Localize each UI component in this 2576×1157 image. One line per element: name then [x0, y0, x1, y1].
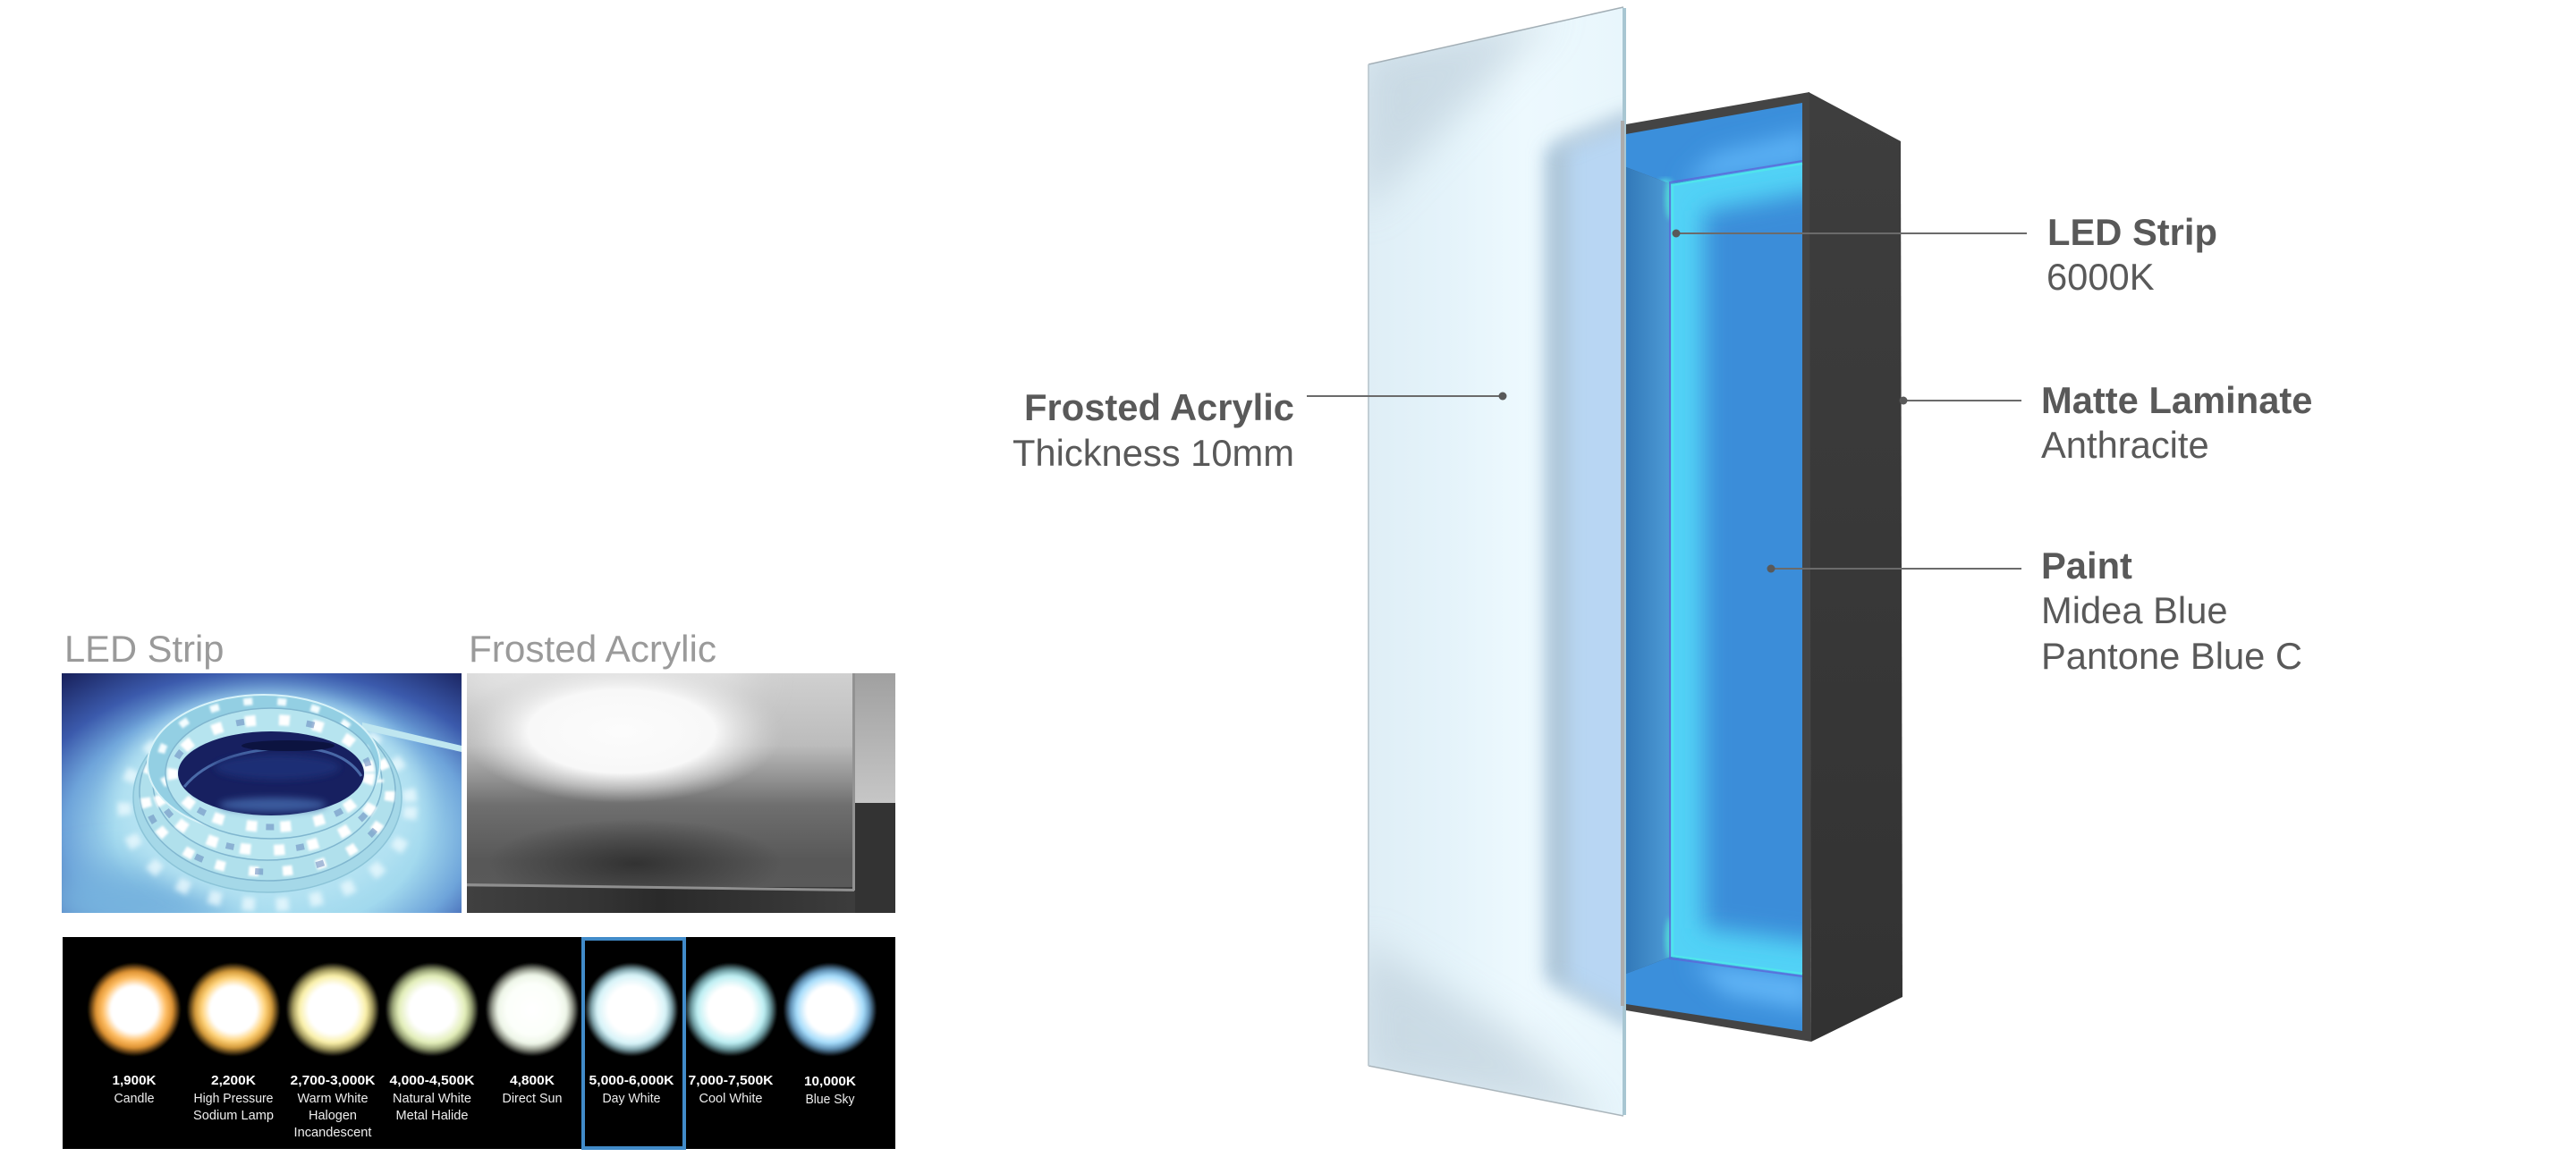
- image: frosted acrylic photo: [467, 673, 895, 913]
- callout: Matte Laminate leader line: [1900, 397, 2021, 404]
- heading: LED Strip photo title: LED Strip: [64, 628, 224, 670]
- icon: 2,700-3,000K glow: Halogen: [309, 1108, 357, 1123]
- icon: 2,700-3,000K glow: [286, 963, 379, 1140]
- icon: 1,900K glow: Candle: [114, 1091, 154, 1106]
- icon: 5,000-6,000K glow: 5,000-6,000K: [589, 1073, 674, 1088]
- text block: Frosted Acrylic label: Frosted Acrylic: [1024, 386, 1294, 428]
- icon: 7,000-7,500K glow: [684, 963, 777, 1106]
- LED strip line: [1670, 161, 1802, 976]
- box front frame: [1626, 92, 1811, 1042]
- image: LED strip coil photo: [62, 673, 462, 913]
- callout: Frosted Acrylic leader line: [1307, 392, 1506, 401]
- text block: LED Strip label: LED Strip: [2047, 211, 2217, 253]
- illustration: frosted acrylic panel: [1360, 7, 1637, 1127]
- floor of box: [1626, 957, 1802, 1031]
- left wall of box: [1626, 167, 1671, 974]
- icon: 2,700-3,000K glow: Warm White: [297, 1091, 369, 1106]
- callout: selected temperature highlight: [583, 939, 684, 1148]
- icon: 4,000-4,500K glow: [386, 963, 479, 1123]
- icon: 10,000K glow: 10,000K: [804, 1074, 856, 1089]
- icon: 7,000-7,500K glow: 7,000-7,500K: [689, 1073, 774, 1088]
- icon: 5,000-6,000K glow: [585, 963, 678, 1106]
- text block: Matte Laminate label: Matte Laminate: [2041, 379, 2312, 421]
- box side laminate: [1809, 92, 1902, 1042]
- icon: 4,800K glow: [486, 963, 579, 1106]
- callout: Paint leader line: [1767, 565, 2021, 572]
- icon: 4,800K glow: 4,800K: [510, 1073, 555, 1088]
- text block: Paint label: [2041, 545, 2302, 677]
- text block: LED Strip label: 6000K: [2046, 256, 2155, 298]
- icon: 1,900K glow: 1,900K: [113, 1073, 157, 1088]
- text block: LED Strip label: [2046, 211, 2217, 298]
- icon: 2,200K glow: 2,200K: [211, 1073, 256, 1088]
- text block: Matte Laminate label: Anthracite: [2041, 424, 2209, 466]
- text block: Frosted Acrylic label: Thickness 10mm: [1013, 432, 1294, 474]
- icon: 4,800K glow: Direct Sun: [503, 1091, 562, 1106]
- ceiling of box: [1626, 103, 1802, 184]
- text block: Paint label: Midea Blue: [2041, 589, 2228, 631]
- text block: Frosted Acrylic label: [1013, 386, 1294, 474]
- icon: 2,700-3,000K glow: 2,700-3,000K: [290, 1073, 376, 1088]
- icon: 4,000-4,500K glow: Metal Halide: [395, 1108, 469, 1123]
- text block: Matte Laminate label: [2041, 379, 2312, 466]
- illustration: open light box: [1626, 92, 1902, 1042]
- icon: 1,900K glow: [88, 963, 181, 1106]
- icon: 7,000-7,500K glow: Cool White: [699, 1091, 762, 1106]
- callout: LED Strip leader line: [1673, 229, 2027, 238]
- chart: color temperature scale: [63, 937, 895, 1149]
- icon: 2,200K glow: Sodium Lamp: [193, 1108, 274, 1123]
- icon: 2,200K glow: High Pressure: [193, 1091, 274, 1106]
- icon: 2,200K glow: [187, 963, 280, 1123]
- icon: 2,700-3,000K glow: Incandescent: [293, 1125, 372, 1140]
- icon: 10,000K glow: [784, 963, 877, 1107]
- text block: Paint label: Pantone Blue C: [2041, 635, 2302, 677]
- text block: Paint label: Paint: [2041, 545, 2132, 587]
- icon: 4,000-4,500K glow: Natural White: [393, 1091, 471, 1106]
- icon: 4,000-4,500K glow: 4,000-4,500K: [390, 1073, 475, 1088]
- back wall with LED glow: [1671, 163, 1802, 975]
- icon: 10,000K glow: Blue Sky: [805, 1092, 855, 1107]
- heading: Frosted Acrylic photo title: Frosted Acrylic: [469, 628, 716, 670]
- icon: 5,000-6,000K glow: Day White: [603, 1091, 660, 1106]
